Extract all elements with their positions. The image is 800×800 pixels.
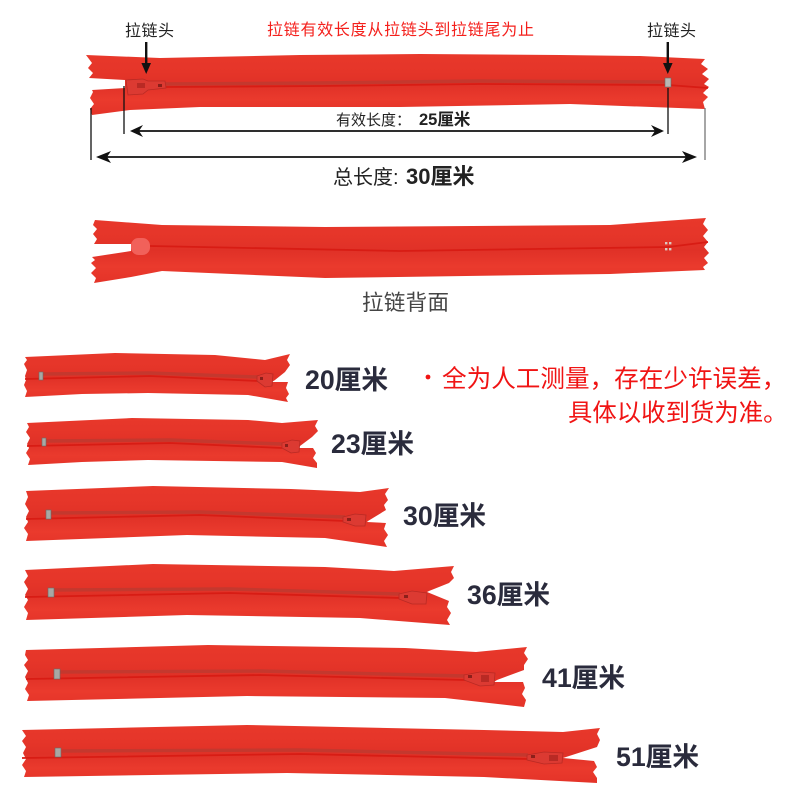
chain	[54, 589, 400, 594]
label: 23厘米	[331, 429, 414, 459]
stop	[42, 438, 46, 446]
seam	[26, 675, 465, 680]
tape	[24, 645, 528, 707]
slider	[126, 79, 166, 95]
tape	[24, 353, 290, 402]
red heading: 拉链有效长度从拉链头到拉链尾为止	[267, 21, 534, 39]
zipper 23cm	[26, 418, 414, 468]
label: slider right: 拉链头	[647, 22, 696, 40]
zipper chain	[165, 81, 668, 84]
zipper 41cm	[24, 645, 625, 707]
stop	[54, 669, 60, 679]
seam	[25, 593, 400, 598]
zipper tape	[86, 54, 709, 115]
bottom stop	[665, 78, 671, 87]
slider	[343, 514, 366, 526]
label: 36厘米	[467, 580, 550, 610]
back slider	[131, 238, 150, 255]
effective length label: 25厘米	[419, 110, 471, 129]
label: 30厘米	[403, 501, 486, 531]
icon: down arrow right	[663, 42, 673, 74]
slider	[257, 373, 273, 387]
label: 51厘米	[616, 742, 699, 772]
note line 2: 具体以收到货为准。	[568, 400, 788, 427]
chain	[42, 373, 258, 377]
note bullet	[426, 375, 430, 379]
slider	[399, 591, 427, 604]
seam	[25, 376, 258, 381]
label: 20厘米	[305, 365, 388, 395]
note line 1: 全为人工测量，存在少许误差，	[442, 365, 786, 393]
back tape	[91, 218, 709, 283]
back stop dots	[665, 242, 671, 250]
tape	[24, 486, 389, 547]
seam	[27, 443, 282, 448]
total length label: 总长度:	[333, 167, 399, 189]
total length label: 30厘米	[406, 164, 474, 189]
zipper seam	[165, 84, 708, 88]
tape	[26, 418, 318, 468]
total length arrow	[91, 108, 705, 163]
seam	[22, 754, 528, 759]
zipper 20cm	[24, 353, 388, 402]
back caption: 拉链背面	[362, 291, 449, 315]
effective length label: 有效长度：	[336, 112, 411, 129]
chain	[46, 440, 282, 444]
tape	[24, 564, 454, 625]
panel: annotated zipper front	[86, 21, 709, 189]
icon: down arrow left	[141, 42, 151, 74]
zipper 51cm	[22, 725, 699, 783]
stop	[48, 588, 54, 597]
chain	[50, 512, 345, 517]
slider	[464, 672, 495, 686]
back seam	[150, 242, 708, 251]
label: slider left: 拉链头	[125, 22, 174, 40]
tape	[22, 725, 600, 783]
panel: zipper back	[91, 218, 709, 315]
effective length arrow	[124, 86, 668, 137]
stop	[39, 372, 43, 380]
zipper 30cm	[24, 486, 486, 547]
chain	[60, 671, 465, 676]
slider	[282, 440, 300, 453]
chain	[62, 750, 528, 755]
label: 41厘米	[542, 663, 625, 693]
note	[426, 365, 788, 427]
stop	[55, 748, 61, 757]
slider	[527, 752, 563, 764]
zipper 36cm	[24, 564, 550, 625]
seam	[26, 515, 345, 521]
stop	[46, 510, 51, 519]
